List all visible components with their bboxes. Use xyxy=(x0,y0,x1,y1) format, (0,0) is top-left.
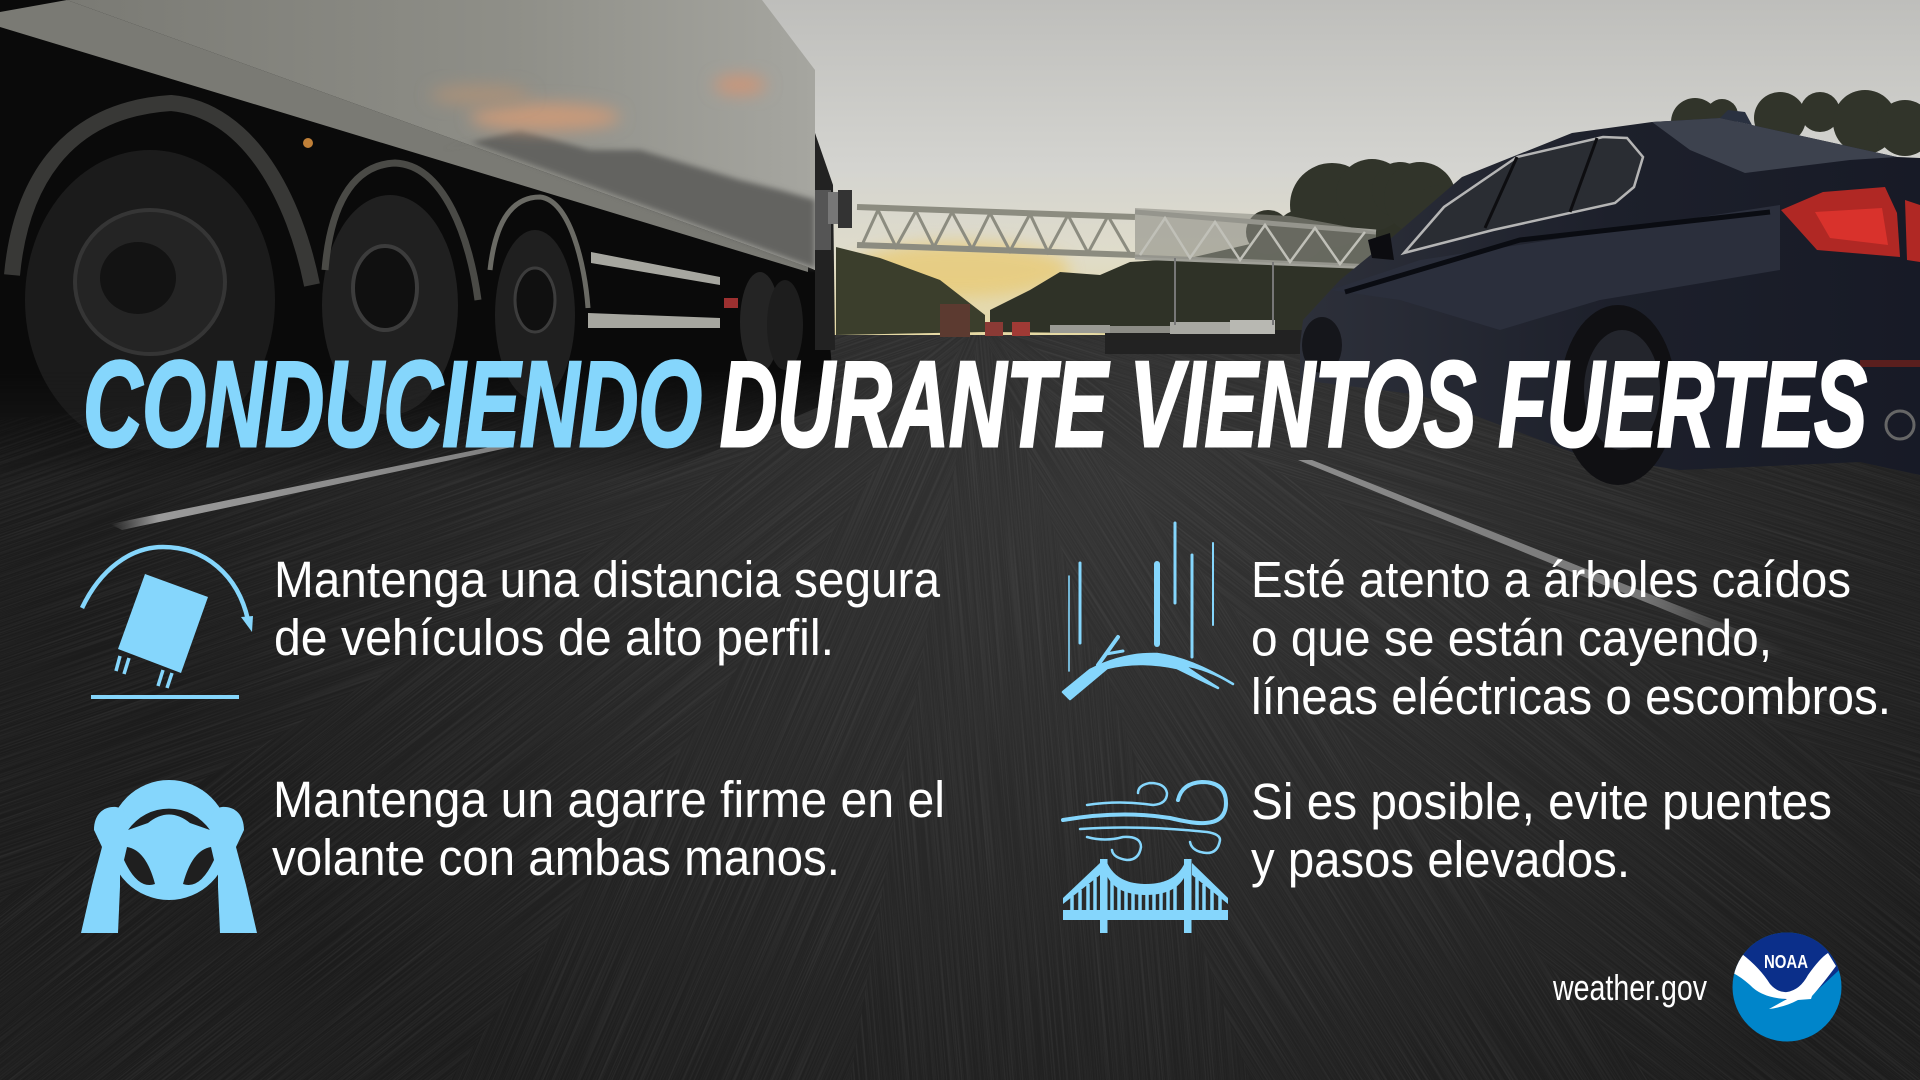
text: grip advice: Mantenga un agarre firme en el xyxy=(273,771,945,828)
car side mirror xyxy=(1368,233,1394,260)
text: distance advice: de vehículos de alto perfil. xyxy=(274,609,834,666)
background: sky xyxy=(760,0,1920,335)
truck side skirt rails xyxy=(588,252,720,328)
icon: NOAA logo: NOAA xyxy=(1764,952,1808,972)
text: grip advice: volante con ambas manos. xyxy=(272,829,840,886)
car windows xyxy=(1404,137,1643,253)
text: bridges advice: Si es posible, evite puentes xyxy=(1251,773,1832,830)
text: distance advice: Mantenga una distancia segura xyxy=(274,551,941,608)
car rear wheel xyxy=(1302,305,1676,485)
text: bridges advice: y pasos elevados. xyxy=(1251,831,1630,888)
truck wheels xyxy=(25,150,803,450)
text: falling trees advice xyxy=(1251,551,1891,725)
text: falling trees advice: o que se están cayendo, xyxy=(1251,610,1772,666)
icon: falling branch xyxy=(1063,523,1233,699)
truck box rail xyxy=(0,0,808,272)
car tail light xyxy=(1781,187,1920,262)
car side highlights xyxy=(1330,205,1780,330)
truck xyxy=(0,0,852,500)
background: overhead gantry xyxy=(857,207,1376,325)
text: falling trees advice: Esté atento a árboles caídos xyxy=(1251,551,1851,608)
icon: wind over bridge xyxy=(1063,782,1228,933)
truck fenders xyxy=(12,103,588,308)
title xyxy=(83,336,1867,472)
car xyxy=(1300,110,1920,485)
sky reflection on box xyxy=(430,75,815,268)
icon: NOAA logo xyxy=(1732,932,1842,1042)
weather.gov website label: weather.gov xyxy=(1552,967,1707,1008)
text: falling trees advice: líneas eléctricas o escombros. xyxy=(1251,668,1891,725)
text: bridges advice xyxy=(1251,773,1832,888)
background: tree lines and distant traffic xyxy=(836,90,1920,354)
title: CONDUCIENDO xyxy=(83,336,702,472)
icon: hands on steering wheel xyxy=(81,780,257,933)
truck box panel xyxy=(67,0,815,270)
truck cab and mirror xyxy=(303,133,852,350)
lane markings xyxy=(110,445,1790,655)
background: road surface xyxy=(0,300,1920,1080)
text: distance advice xyxy=(274,551,941,666)
icon: truck tipping over xyxy=(82,547,253,699)
text: grip advice xyxy=(272,771,945,886)
